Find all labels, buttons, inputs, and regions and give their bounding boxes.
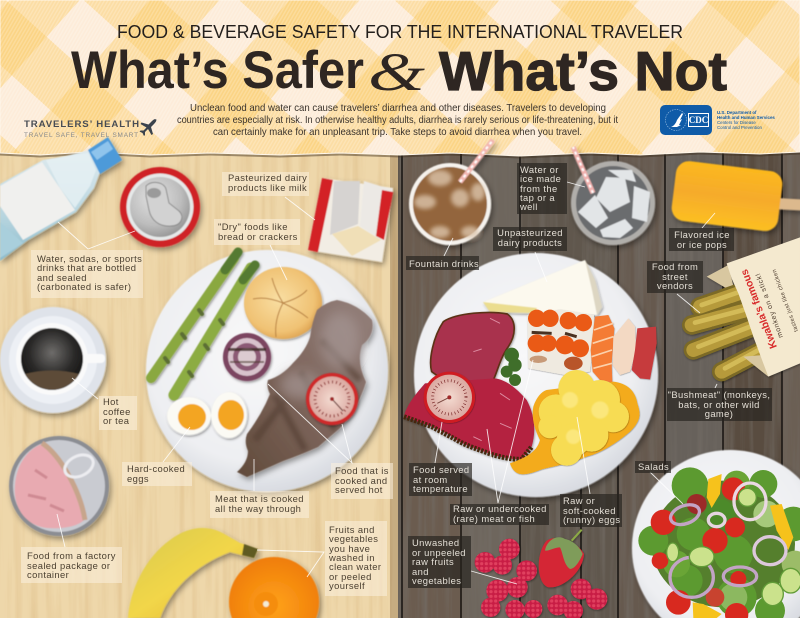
icon: raspberries and strawberry	[475, 530, 607, 618]
label: meat cooked through	[210, 491, 309, 518]
label: unwashed produce: vegetables	[412, 575, 461, 586]
label: water or ice: well	[519, 201, 538, 212]
icon: soda can top	[120, 167, 200, 247]
label: hard-cooked eggs: Hard-cooked	[127, 463, 185, 474]
label: washed fruits: yourself	[329, 580, 365, 591]
label: raw meat or fish: Raw or undercooked	[453, 503, 547, 514]
label: hot coffee	[99, 396, 137, 430]
label: fountain drinks: Fountain drinks	[409, 258, 479, 269]
label: unpasteurized dairy	[493, 227, 567, 251]
label: washed fruits: you have	[329, 543, 370, 554]
panel: salad plate	[632, 450, 800, 618]
label: cooked and served hot: Food that is	[335, 465, 389, 476]
label: washed fruits: or peeled	[329, 571, 372, 582]
label: bushmeat: bats, or other wild	[678, 399, 760, 410]
sushi roll	[527, 309, 594, 375]
label: unpasteurized dairy: Unpasteurized	[497, 227, 563, 238]
label: runny eggs: (runny) eggs	[563, 514, 620, 525]
rare steak	[404, 312, 534, 459]
eggs	[167, 392, 247, 438]
icon: ice pop	[670, 160, 800, 232]
left wood background	[0, 150, 399, 618]
label: bottled drinks: Water, sodas, or sports	[37, 253, 142, 264]
label: hot coffee: coffee	[103, 406, 131, 417]
CDC logo: Control and Prevention	[717, 125, 762, 130]
label: unwashed produce: and	[412, 566, 429, 577]
leader lines: safer side	[57, 197, 352, 577]
label: water or ice: Water or	[520, 164, 559, 175]
label: meat cooked through: all the way through	[215, 503, 301, 514]
icon: kebabs in paper bag: monkey on a stick!	[755, 272, 785, 339]
bread roll	[244, 267, 322, 339]
label: bushmeat	[667, 388, 772, 421]
label: water or ice	[517, 163, 567, 214]
label: water or ice: from the	[520, 183, 558, 194]
label: pasteurized dairy	[222, 172, 309, 196]
label: flavored ice: or ice pops	[677, 239, 727, 250]
steak	[237, 300, 373, 477]
icon: fountain drink	[409, 140, 493, 245]
label: unpasteurized dairy: dairy products	[498, 237, 562, 248]
label: bottled drinks	[31, 250, 143, 298]
label: washed fruits	[325, 521, 387, 596]
label: hard-cooked eggs	[122, 462, 192, 486]
right dark wood background	[398, 150, 800, 618]
label: dry foods: "Dry" foods like	[218, 221, 288, 232]
panel: safer plate	[146, 250, 388, 492]
label: unwashed produce	[408, 536, 471, 588]
label: pasteurized dairy: Pasteurized dairy	[228, 172, 307, 183]
label: flavored ice	[669, 228, 734, 251]
icon: kebabs in paper bag: tastes just like chicken	[772, 268, 800, 332]
travelers health logo: TRAVELERS’ HEALTH	[24, 119, 139, 130]
cucumbers	[667, 488, 800, 606]
label: factory sealed food	[21, 547, 122, 583]
leader lines: not safe side	[435, 182, 717, 584]
label: pasteurized dairy: products like milk	[228, 182, 307, 193]
label: flavored ice: Flavored ice	[674, 229, 730, 240]
label: unwashed produce: Unwashed	[412, 537, 460, 548]
icon: kebabs in paper bag	[692, 237, 800, 377]
label: washed fruits: vegetables	[329, 533, 378, 544]
icon: milk carton	[308, 178, 393, 262]
CDC logo: CDC	[689, 115, 708, 125]
label: bottled drinks: (carbonated is safer)	[37, 281, 131, 292]
CDC logo: Health and Human Services	[717, 115, 775, 120]
label: runny eggs: Raw or	[563, 495, 595, 506]
label: street vendors	[647, 261, 703, 293]
main title: &	[368, 42, 425, 102]
label: runny eggs	[560, 494, 622, 527]
label: factory sealed food: container	[27, 569, 69, 580]
thermometer	[424, 372, 475, 423]
yellow peppers	[693, 474, 793, 618]
label: dry foods: bread or crackers	[218, 231, 298, 242]
label: cooked and served hot: cooked and	[335, 475, 387, 486]
icon: orange	[229, 557, 319, 618]
label: bottled drinks: drinks that are bottled	[37, 262, 136, 273]
label: hot coffee: Hot	[103, 396, 119, 407]
label: dry foods	[214, 219, 300, 245]
icon: banana	[128, 528, 258, 618]
nigiri sushi	[591, 315, 657, 383]
supertitle: FOOD & BEVERAGE SAFETY FOR THE INTERNATIONAL TRAVELER	[117, 22, 683, 42]
label: cooked and served hot	[331, 463, 393, 499]
label: cooked and served hot: served hot	[335, 484, 383, 495]
parsley	[501, 348, 522, 386]
asparagus	[151, 252, 255, 395]
label: hard-cooked eggs: eggs	[127, 473, 149, 484]
main title	[71, 40, 727, 102]
label: washed fruits: clean water	[329, 561, 381, 572]
label: bushmeat: "Bushmeat" (monkeys,	[668, 389, 770, 400]
header gingham banner	[0, 0, 800, 158]
plate	[414, 253, 658, 497]
label: street vendors: Food from	[652, 261, 698, 272]
main title: What’s Safer	[71, 41, 364, 100]
label: washed fruits: washed in	[328, 552, 375, 563]
label: hot coffee: or tea	[103, 415, 130, 426]
label: runny eggs: soft-cooked	[563, 505, 616, 516]
intro paragraph: Unclean food and water can cause travelers’ diarrhea and other diseases. Travelers to developing	[190, 103, 606, 114]
icon: water bottle	[0, 137, 122, 261]
onion slice	[223, 333, 271, 381]
icon: sealed tin of food	[9, 436, 109, 536]
label: washed fruits: Fruits and	[329, 524, 375, 535]
icon: coffee cup	[0, 307, 106, 413]
label: bushmeat: game)	[705, 408, 733, 419]
label: water or ice: tap or a	[520, 192, 555, 203]
label: unwashed produce: raw fruits	[412, 556, 454, 567]
icon: glass of ice	[571, 147, 655, 245]
CDC logo	[660, 105, 775, 135]
sauce	[510, 382, 640, 474]
travelers health logo	[24, 119, 156, 139]
label: meat cooked through: Meat that is cooked	[215, 493, 304, 504]
label: salads: Salads	[638, 461, 669, 472]
intro paragraph	[177, 103, 618, 138]
intro paragraph: can certainly make for an unpleasant trip. Take steps to avoid diarrhea when you travel.	[213, 127, 582, 138]
label: raw meat or fish	[450, 503, 549, 525]
label: food at room temperature	[409, 463, 472, 496]
label: food at room temperature: at room	[413, 474, 448, 485]
label: food at room temperature: temperature	[413, 483, 468, 494]
label: food at room temperature: Food served	[413, 464, 470, 475]
label: unwashed produce: or unpeeled	[412, 547, 466, 558]
label: factory sealed food: sealed package or	[27, 560, 110, 571]
travelers health logo: TRAVEL SAFE, TRAVEL SMART	[24, 132, 138, 139]
thermometer	[306, 373, 358, 425]
plate	[146, 250, 388, 492]
label: street vendors: vendors	[657, 280, 693, 291]
label: water or ice: ice made	[520, 173, 561, 184]
salad greens	[638, 467, 800, 618]
label: street vendors: street	[662, 271, 688, 282]
scrambled eggs	[538, 370, 629, 466]
cheese wedge	[483, 260, 602, 315]
tomatoes	[651, 477, 748, 618]
panel: not safe plate	[404, 253, 658, 497]
icon: kebabs in paper bag: Kwabla’s famous	[738, 267, 780, 350]
intro paragraph: countries are especially at risk. In otherwise healthy adults, diarrhea is rarely serious or life-threatening, but it	[177, 115, 618, 126]
label: factory sealed food: Food from a factory	[27, 550, 116, 561]
label: raw meat or fish: (rare) meat or fish	[453, 513, 535, 524]
main title: What’s Not	[439, 40, 727, 102]
onion rings	[668, 483, 786, 597]
label: bottled drinks: and sealed	[37, 272, 87, 283]
CDC logo: Centers for Disease	[717, 120, 756, 125]
CDC logo: U.S. Department of	[717, 110, 757, 115]
